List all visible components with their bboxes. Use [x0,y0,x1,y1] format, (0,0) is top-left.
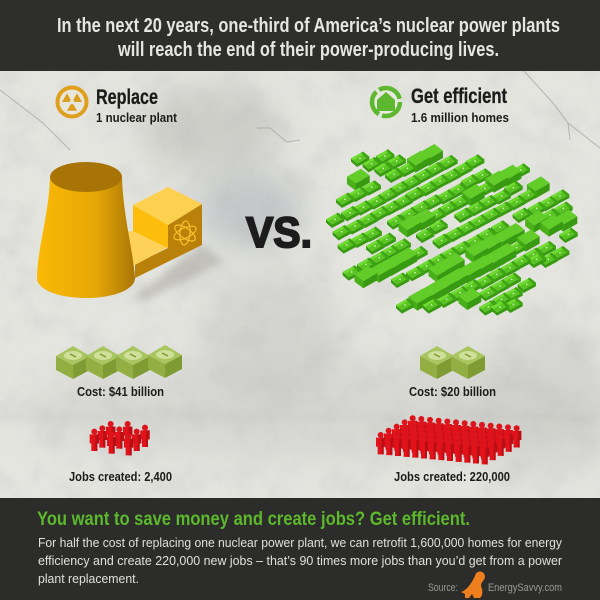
headline line 2: will reach the end of their power-producing lives. [117,39,499,61]
money: $41 billion [56,345,182,379]
top banner [0,0,600,71]
body text: efficiency and create 220,000 new jobs – that’s 90 times more jobs than you’d get from a power [38,553,563,568]
people: 2,400 jobs [90,421,150,455]
houses cluster [326,144,578,316]
label: jobs: Jobs created: 220,000 [394,470,510,484]
icon: atom [172,221,198,245]
money: $20 billion [420,346,485,379]
body text: plant replacement. [38,571,139,586]
subheading: 1 nuclear plant: 1 nuclear plant [96,110,178,125]
source name: EnergySavvy.com [488,582,562,594]
label: jobs: Jobs created: 2,400 [69,470,172,484]
body text [38,535,563,586]
label: cost: Cost: $20 billion [409,385,496,399]
panel: get efficient [326,85,578,484]
heading: replace: Replace [96,86,158,109]
nuclear plant illustration [37,162,225,300]
callout heading: You want to save money and create jobs? Get efficient. [37,509,470,530]
subheading: 1.6 million homes: 1.6 million homes [411,110,509,125]
icon: radiation [58,88,86,116]
versus label: VS. [246,209,312,257]
source label: Source: [428,582,458,594]
icon: orange dinosaur [461,572,485,598]
people: 220,000 jobs [376,415,521,464]
bottom banner [0,498,600,600]
heading: get efficient: Get efficient [411,85,507,108]
body text: For half the cost of replacing one nuclear power plant, we can retrofit 1,600,000 homes for energy [38,535,562,550]
icon: green home [372,88,400,116]
label: cost: Cost: $41 billion [77,385,164,399]
panel: replace [37,86,225,484]
